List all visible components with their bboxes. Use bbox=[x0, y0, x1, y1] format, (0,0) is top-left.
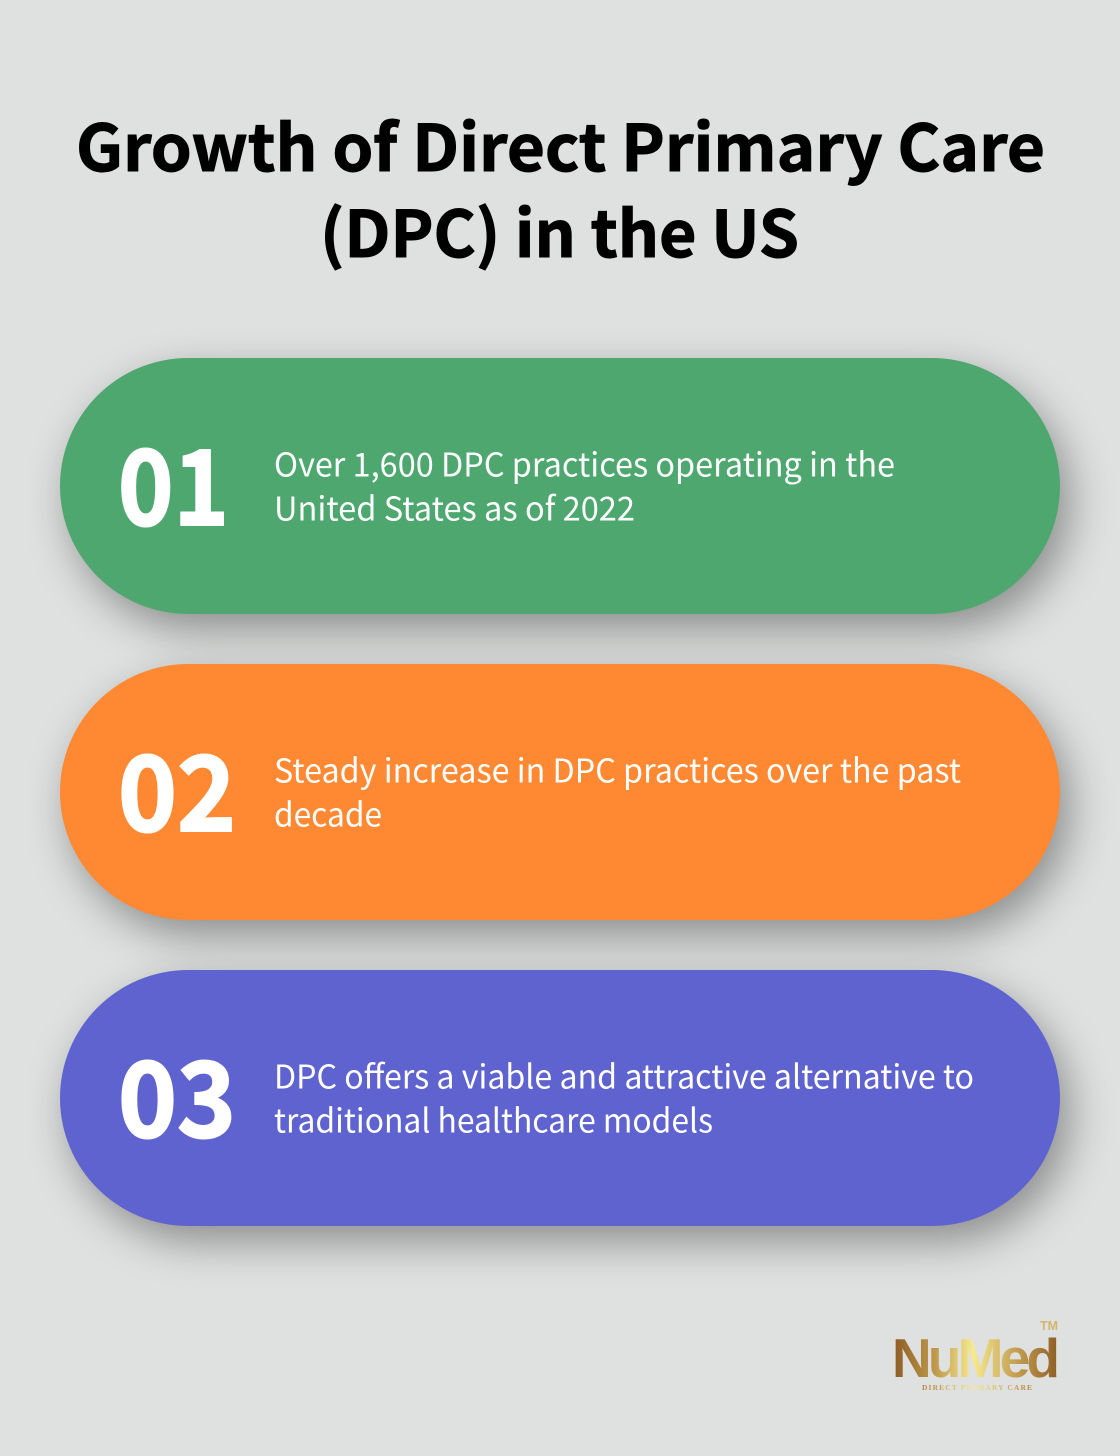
title bbox=[76, 98, 1045, 276]
text block: step 01: United States as of 2022 bbox=[274, 482, 635, 530]
pill: indigo bbox=[60, 970, 1060, 1226]
panel: step 01 bbox=[60, 358, 1060, 614]
logo: NuMed: DIRECT PRIMARY CARE bbox=[922, 1383, 1032, 1392]
text block: step 03: DPC offers a viable and attractive alternative to bbox=[274, 1050, 974, 1098]
panel: step 03 bbox=[60, 970, 1060, 1226]
text block: step 03 bbox=[274, 1050, 974, 1142]
number 02: 02 bbox=[118, 710, 236, 861]
pill: orange bbox=[60, 664, 1060, 920]
title: Growth of Direct Primary Care bbox=[76, 98, 1045, 190]
text block: step 02: decade bbox=[274, 788, 382, 836]
text block: step 02: Steady increase in DPC practices over the past bbox=[274, 744, 961, 792]
logo: NuMed: TM bbox=[1040, 1318, 1058, 1333]
number 03: 03 bbox=[118, 1016, 236, 1167]
number 01: 01 bbox=[118, 404, 229, 555]
text block: step 02 bbox=[274, 744, 961, 836]
panel: step 02 bbox=[60, 664, 1060, 920]
text block: step 01 bbox=[274, 438, 895, 530]
text block: step 03: traditional healthcare models bbox=[274, 1094, 713, 1142]
pill: green bbox=[60, 358, 1060, 614]
text block: step 01: Over 1,600 DPC practices operating in the bbox=[274, 438, 895, 486]
title: (DPC) in the US bbox=[320, 184, 799, 276]
logo: NuMed: NuMed bbox=[892, 1327, 1060, 1389]
